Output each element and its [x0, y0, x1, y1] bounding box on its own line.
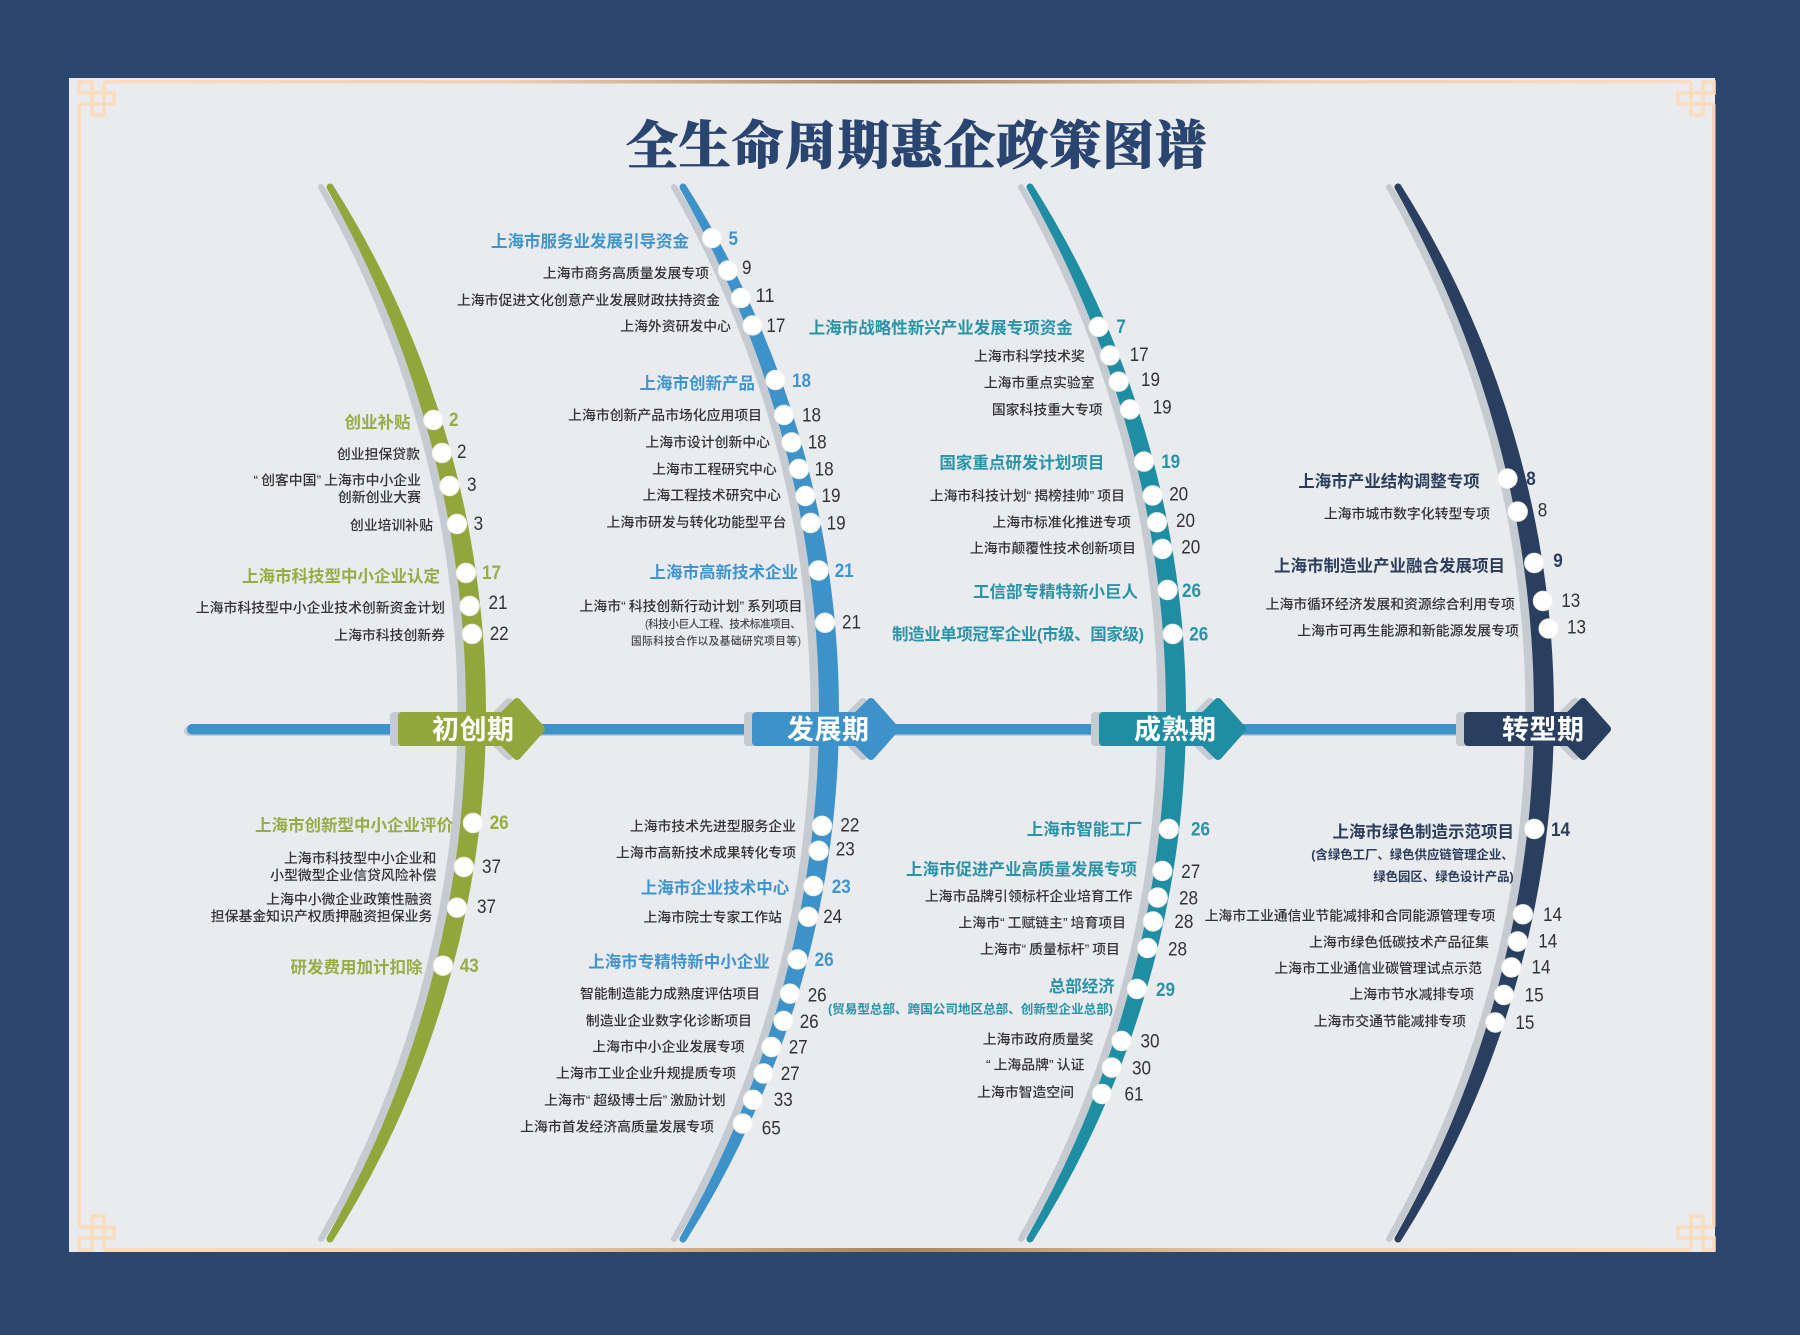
- item: 循环经济发展和资源综合利用专项: [1266, 591, 1580, 612]
- item: 技术创新资金计划: [196, 593, 508, 616]
- heading: 总部经济: 29: [1156, 980, 1175, 1001]
- heading: 上海市产业结构调整专项: [1298, 469, 1536, 491]
- item: 上海市重点实验室: 上海市重点实验室: [984, 375, 1095, 391]
- item: 市场化应用项目: 上海市创新产品市场化应用项目: [568, 407, 762, 423]
- item: 上海市标准化推进专项: 20: [1176, 511, 1195, 532]
- item: 绿色低碳技术产品征集: 上海市绿色低碳技术产品征集: [1309, 934, 1489, 950]
- heading: 上海市企业技术中心: 上海市企业技术中心: [641, 878, 790, 898]
- item: 上海外资研发中心: [620, 316, 785, 337]
- item: 上海市中小企业发展专项: 上海市中小企业发展专项: [592, 1039, 745, 1055]
- heading: 制造业单项冠军企业: 26: [1189, 624, 1208, 646]
- item: 上海市院士专家工作站: 上海市院士专家工作站: [643, 909, 782, 925]
- item: 上海市智造空间: [977, 1084, 1144, 1106]
- item: 上海市交通节能减排专项: [1314, 1013, 1534, 1034]
- item: 上海市科学技术奖: [974, 345, 1149, 366]
- item: 节能减排和合同能源管理专项: 上海市工业通信业节能减排和合同能源管理专项: [1205, 908, 1495, 924]
- item: 科技创新行动计划: 国际科技合作以及基础研究项目等): [631, 634, 801, 648]
- heading: 上海市科技型中小企业认定: 上海市科技型中小企业认定: [242, 566, 440, 586]
- item: 信贷风险补偿: 37: [482, 857, 501, 878]
- item: 研发与转化功能型平台: [607, 513, 846, 534]
- item: 上海市院士专家工作站: 24: [823, 907, 843, 928]
- item: 上海市科技创新券: [334, 624, 509, 645]
- title: 全生命周期惠企政策图谱: [626, 118, 1207, 176]
- item: 上海市政府质量奖: [983, 1031, 1160, 1052]
- heading: 工信部专精特新小巨人: 工信部专精特新小巨人: [973, 582, 1138, 602]
- heading: 上海市产业结构调整专项: 上海市产业结构调整专项: [1298, 471, 1480, 491]
- heading: 上海市绿色制造示范项目: [1311, 819, 1570, 884]
- item: 品牌引领标杆企业培育工作: 上海市品牌引领标杆企业培育工作: [925, 888, 1133, 904]
- rib: 转型期 curve: [1389, 187, 1550, 1239]
- item: 智能制造能力成熟度评估项目: 智能制造能力成熟度评估项目: [580, 986, 760, 1002]
- heading: 研发费用加计扣除: [290, 956, 479, 977]
- item: 上海市智造空间: 上海市智造空间: [977, 1084, 1074, 1100]
- heading: 上海市服务业发展引导资金: 上海市服务业发展引导资金: [491, 231, 690, 251]
- item: 制造业企业数字化诊断项目: 26: [800, 1012, 819, 1033]
- item: 节能减排和合同能源管理专项: [1205, 905, 1562, 926]
- item: 创业培训补贴: 3: [474, 514, 483, 535]
- item: 超级博士后激励计划: 上海市“超级博士后”激励计划: [544, 1092, 726, 1108]
- heading: 战略性新兴产业发展专项资金: 7: [1116, 317, 1126, 338]
- heading: 上海市专精特新中小企业: 26: [815, 950, 834, 971]
- item: 上海品牌认证: “上海品牌”认证: [986, 1057, 1084, 1073]
- panel: 转型期 policies: [1205, 469, 1586, 1034]
- item: 上海工程技术研究中心: 19: [822, 486, 840, 507]
- heading: 上海市高新技术企业: 上海市高新技术企业: [650, 562, 798, 582]
- item: 揭榜挂帅项目: 20: [1169, 484, 1188, 506]
- item: 智能制造能力成熟度评估项目: [580, 984, 827, 1006]
- item: 上海市节水减排专项: 上海市节水减排专项: [1349, 986, 1474, 1002]
- heading: 战略性新兴产业发展专项资金: 上海市战略性新兴产业发展专项资金: [809, 318, 1073, 338]
- heading: 制造业单项冠军企业: [892, 624, 1208, 646]
- item: 国家科技重大专项: 19: [1153, 398, 1172, 418]
- heading: 制造业单项冠军企业: 制造业单项冠军企业(市级、国家级): [892, 624, 1144, 644]
- main timeline axis: [184, 724, 1477, 736]
- item: 融资担保业务: 37: [477, 897, 496, 918]
- item: 上海市标准化推进专项: 上海市标准化推进专项: [992, 514, 1131, 530]
- heading: 上海市高新技术企业: 21: [835, 561, 854, 582]
- arrow: 初创期: 初创期: [432, 715, 514, 745]
- heading: 创业补贴: [344, 410, 458, 432]
- item: 创客中国: 创新创业大赛: [338, 489, 421, 505]
- item: 首发经济高质量发展专项: 上海市首发经济高质量发展专项: [520, 1118, 714, 1134]
- item: 节能减排和合同能源管理专项: 14: [1543, 905, 1562, 926]
- item: 颠覆性技术创新项目: 上海市颠覆性技术创新项目: [970, 540, 1136, 556]
- item: 工赋链主培育项目: [958, 912, 1193, 933]
- item: 市场化应用项目: 18: [802, 406, 821, 426]
- item: 上海市科技创新券: 22: [490, 624, 509, 645]
- item: 财政扶持资金: 上海市促进文化创意产业发展财政扶持资金: [457, 292, 720, 308]
- arrow: 转型期: 转型期: [1502, 715, 1584, 745]
- item: 循环经济发展和资源综合利用专项: 上海市循环经济发展和资源综合利用专项: [1266, 596, 1515, 612]
- item: 碳管理试点示范: 14: [1532, 958, 1551, 978]
- item: 上海外资研发中心: 17: [766, 316, 785, 337]
- heading: 上海市智能工厂: 上海市智能工厂: [1027, 819, 1142, 839]
- item: 创业担保贷款: [337, 442, 466, 463]
- item: 上海市重点实验室: [984, 370, 1160, 391]
- item: 上海工程技术研究中心: 上海工程技术研究中心: [643, 487, 781, 503]
- item: 上海市设计创新中心: [645, 432, 827, 454]
- arrow: 转型期: [1460, 702, 1607, 756]
- item: 信贷风险补偿: [270, 850, 501, 883]
- item: 上海市政府质量奖: 30: [1140, 1032, 1160, 1052]
- heading: 上海市创新产品: 上海市创新产品: [640, 373, 755, 393]
- item: 国家科技重大专项: [992, 398, 1172, 419]
- item: 质量标杆项目: 28: [1168, 940, 1187, 960]
- item: 市场化应用项目: [568, 405, 821, 426]
- heading: 总部经济: (贸易型总部、跨国公司地区总部、创新型企业总部): [828, 1002, 1113, 1017]
- item: 商务高质量发展专项: [543, 258, 752, 281]
- item: 创业培训补贴: 创业培训补贴: [350, 517, 433, 533]
- item: 上海市标准化推进专项: [992, 511, 1195, 532]
- item: 可再生能源和新能源发展专项: [1297, 618, 1586, 638]
- item: 创客中国: “创客中国”上海市中小企业: [253, 472, 421, 488]
- heading: 上海市科技型中小企业认定: [242, 563, 501, 586]
- panel: 初创期 policies: [196, 410, 509, 977]
- item: 绿色低碳技术产品征集: 14: [1538, 932, 1558, 952]
- heading: 上海市智能工厂: [1027, 819, 1210, 840]
- arrow: 初创期: [394, 702, 541, 756]
- arrow: 发展期: [748, 702, 895, 756]
- heading: 国家重点研发计划项目: [939, 452, 1180, 473]
- heading: 上海市企业技术中心: 23: [832, 877, 851, 898]
- item: 科技创新行动计划: [580, 598, 861, 648]
- item: 制造业企业数字化诊断项目: [586, 1011, 819, 1033]
- item: 揭榜挂帅项目: 上海市科技计划“揭榜挂帅”项目: [930, 488, 1125, 504]
- heading: 国家重点研发计划项目: 19: [1161, 452, 1180, 473]
- item: 制造业企业数字化诊断项目: 制造业企业数字化诊断项目: [586, 1012, 752, 1028]
- heading: 国家重点研发计划项目: 国家重点研发计划项目: [939, 452, 1104, 472]
- heading: 上海市产业结构调整专项: 8: [1526, 469, 1536, 490]
- heading: 上海市服务业发展引导资金: [491, 228, 738, 251]
- item: 研发与转化功能型平台: 上海市研发与转化功能型平台: [607, 514, 786, 530]
- heading: 创业补贴: 创业补贴: [344, 413, 410, 432]
- item: 融资担保业务: [211, 891, 496, 924]
- item: 上海市技术先进型服务企业: 上海市技术先进型服务企业: [630, 818, 796, 834]
- item: 商务高质量发展专项: 上海市商务高质量发展专项: [543, 265, 709, 281]
- item: 技术创新资金计划: 21: [488, 593, 508, 614]
- item: 上海品牌认证: 30: [1132, 1058, 1151, 1080]
- heading: 上海市专精特新中小企业: 上海市专精特新中小企业: [588, 952, 770, 972]
- item: 颠覆性技术创新项目: [970, 538, 1200, 559]
- arrow: 成熟期: 成熟期: [1134, 714, 1216, 745]
- item: 超级博士后激励计划: 33: [774, 1090, 793, 1111]
- item: 财政扶持资金: 11: [756, 286, 774, 307]
- item: 可再生能源和新能源发展专项: 上海市可再生能源和新能源发展专项: [1297, 622, 1519, 638]
- item: 品牌引领标杆企业培育工作: 28: [1179, 888, 1198, 910]
- rib: 初创期 curve: [321, 187, 482, 1239]
- item: 工业企业升规提质专项: [556, 1064, 800, 1085]
- heading: 上海市创新型中小企业评价: [255, 813, 509, 835]
- heading: 上海市制造业产业融合发展项目: 9: [1553, 551, 1563, 572]
- item: 上海市节水减排专项: [1349, 985, 1544, 1006]
- item: 上海市科技创新券: 上海市科技创新券: [334, 627, 445, 643]
- heading: 创业补贴: 2: [449, 410, 458, 431]
- item: 质量标杆项目: [980, 938, 1187, 960]
- item: 颠覆性技术创新项目: 20: [1181, 538, 1200, 558]
- item: 研发与转化功能型平台: 19: [827, 514, 846, 534]
- rib: 成熟期 curve: [1021, 187, 1182, 1239]
- item: 高新技术成果转化专项: [616, 840, 855, 860]
- item: 上海市中小企业发展专项: [592, 1037, 808, 1058]
- item: 上海市城市数字化转型专项: [1324, 500, 1547, 522]
- item: 上海外资研发中心: 上海外资研发中心: [620, 318, 731, 334]
- heading: 工信部专精特新小巨人: 26: [1182, 581, 1201, 602]
- heading: 研发费用加计扣除: 43: [460, 956, 479, 977]
- heading: 促进产业高质量发展专项: 上海市促进产业高质量发展专项: [906, 859, 1138, 879]
- item: 上海工程技术研究中心: [643, 486, 840, 507]
- item: 上海市工程研究中心: 上海市工程研究中心: [652, 461, 777, 477]
- item: 上海市城市数字化转型专项: 8: [1538, 500, 1547, 522]
- heading: 上海市绿色制造示范项目: (含绿色工厂、绿色供应链管理企业、: [1311, 847, 1514, 862]
- item: 信贷风险补偿: 上海市科技型中小企业和: [284, 850, 436, 866]
- item: 高新技术成果转化专项: 23: [836, 840, 855, 860]
- item: 创业担保贷款: 2: [457, 442, 466, 463]
- item: 创客中国: [253, 472, 476, 505]
- heading: 上海市绿色制造示范项目: 14: [1551, 820, 1570, 841]
- item: 创客中国: 3: [467, 475, 476, 496]
- item: 上海市工程研究中心: [652, 459, 834, 480]
- item: 上海市智造空间: 61: [1124, 1084, 1144, 1106]
- heading: 上海市绿色制造示范项目: 上海市绿色制造示范项目: [1332, 822, 1514, 842]
- item: 首发经济高质量发展专项: [520, 1114, 781, 1140]
- item: 工赋链主培育项目: 28: [1174, 912, 1193, 933]
- rib: 发展期 curve: [674, 187, 835, 1239]
- item: 工业企业升规提质专项: 上海市工业企业升规提质专项: [556, 1065, 736, 1081]
- icon: corner ornament top left: [79, 82, 114, 115]
- item: 财政扶持资金: [457, 286, 774, 308]
- item: 上海市城市数字化转型专项: 上海市城市数字化转型专项: [1324, 505, 1490, 521]
- heading: 上海市创新型中小企业评价: 26: [490, 813, 509, 834]
- heading: 上海市制造业产业融合发展项目: [1274, 551, 1563, 576]
- item: 科技创新行动计划: (科技小巨人工程、技术标准项目、: [645, 618, 801, 630]
- item: 工赋链主培育项目: 上海市“工赋链主”培育项目: [958, 915, 1126, 931]
- item: 绿色低碳技术产品征集: [1309, 932, 1558, 952]
- panel: 发展期 policies: [457, 228, 861, 1139]
- item: 可再生能源和新能源发展专项: 13: [1567, 618, 1586, 638]
- item: 揭榜挂帅项目: [930, 484, 1188, 506]
- heading: 上海市创新型中小企业评价: 上海市创新型中小企业评价: [255, 815, 454, 835]
- heading: 总部经济: [828, 976, 1175, 1017]
- heading: 研发费用加计扣除: 研发费用加计扣除: [290, 957, 423, 977]
- heading: 促进产业高质量发展专项: 27: [1181, 862, 1200, 883]
- item: 上海市节水减排专项: 15: [1525, 986, 1544, 1006]
- item: 上海市院士专家工作站: [643, 907, 843, 928]
- item: 技术创新资金计划: 上海市科技型中小企业技术创新资金计划: [196, 600, 445, 616]
- heading: 上海市高新技术企业: [650, 561, 854, 582]
- heading: 上海市服务业发展引导资金: 5: [728, 229, 738, 250]
- item: 信贷风险补偿: 小型微型企业信贷风险补偿: [270, 867, 436, 883]
- item: 碳管理试点示范: [1274, 958, 1551, 978]
- item: 首发经济高质量发展专项: 65: [762, 1118, 781, 1140]
- item: 上海市设计创新中心: 18: [808, 432, 827, 454]
- heading: 上海市科技型中小企业认定: 17: [482, 563, 501, 584]
- panel: 成熟期 policies: [809, 317, 1210, 1106]
- heading: 上海市创新产品: 18: [792, 371, 811, 392]
- item: 质量标杆项目: 上海市“质量标杆”项目: [980, 941, 1120, 957]
- item: 上海市政府质量奖: 上海市政府质量奖: [983, 1031, 1094, 1047]
- heading: 上海市制造业产业融合发展项目: 上海市制造业产业融合发展项目: [1274, 556, 1505, 576]
- icon: corner ornament bottom right: [1678, 1216, 1714, 1250]
- heading: 工信部专精特新小巨人: [973, 580, 1201, 602]
- item: 上海品牌认证: [986, 1057, 1151, 1080]
- item: 上海市技术先进型服务企业: [630, 816, 859, 836]
- item: 上海市交通节能减排专项: 上海市交通节能减排专项: [1314, 1013, 1466, 1029]
- heading: 上海市创新产品: [640, 370, 811, 393]
- item: 上海市技术先进型服务企业: 22: [840, 816, 859, 836]
- heading: 总部经济: 总部经济: [1049, 976, 1115, 996]
- arrow: 发展期: 发展期: [787, 715, 869, 745]
- item: 高新技术成果转化专项: 上海市高新技术成果转化专项: [616, 844, 796, 860]
- item: 上海市设计创新中心: 上海市设计创新中心: [645, 434, 770, 450]
- heading: 上海市智能工厂: 26: [1191, 820, 1210, 840]
- heading: 上海市企业技术中心: [641, 876, 851, 898]
- item: 循环经济发展和资源综合利用专项: 13: [1561, 591, 1580, 612]
- item: 上海市重点实验室: 19: [1141, 370, 1160, 391]
- item: 科技创新行动计划: 21: [842, 612, 861, 634]
- item: 融资担保业务: 上海中小微企业政策性融资: [266, 891, 432, 907]
- item: 上海市中小企业发展专项: 27: [789, 1038, 808, 1058]
- item: 上海市科学技术奖: 上海市科学技术奖: [974, 348, 1085, 364]
- heading: 促进产业高质量发展专项: [906, 859, 1200, 883]
- item: 创业担保贷款: 创业担保贷款: [337, 446, 420, 462]
- item: 创业培训补贴: [350, 514, 483, 535]
- arrow: 成熟期: [1095, 702, 1242, 756]
- item: 上海市科学技术奖: 17: [1130, 345, 1149, 366]
- item: 上海市交通节能减排专项: 15: [1515, 1013, 1534, 1034]
- heading: 上海市专精特新中小企业: [588, 950, 834, 972]
- item: 品牌引领标杆企业培育工作: [925, 888, 1198, 910]
- icon: corner ornament bottom left: [79, 1216, 114, 1250]
- icon: corner ornament top right: [1678, 82, 1714, 115]
- item: 智能制造能力成熟度评估项目: 26: [808, 986, 827, 1006]
- heading: 上海市绿色制造示范项目: 绿色园区、绿色设计产品): [1373, 869, 1514, 884]
- item: 融资担保业务: 担保基金知识产权质押融资担保业务: [211, 908, 432, 924]
- item: 上海市工程研究中心: 18: [815, 460, 834, 480]
- item: 碳管理试点示范: 上海市工业通信业碳管理试点示范: [1274, 960, 1482, 976]
- item: 超级博士后激励计划: [544, 1090, 793, 1111]
- item: 科技创新行动计划: 上海市“科技创新行动计划”系列项目: [580, 598, 802, 614]
- item: 工业企业升规提质专项: 27: [781, 1064, 800, 1085]
- item: 国家科技重大专项: 国家科技重大专项: [992, 401, 1103, 417]
- item: 商务高质量发展专项: 9: [742, 258, 752, 279]
